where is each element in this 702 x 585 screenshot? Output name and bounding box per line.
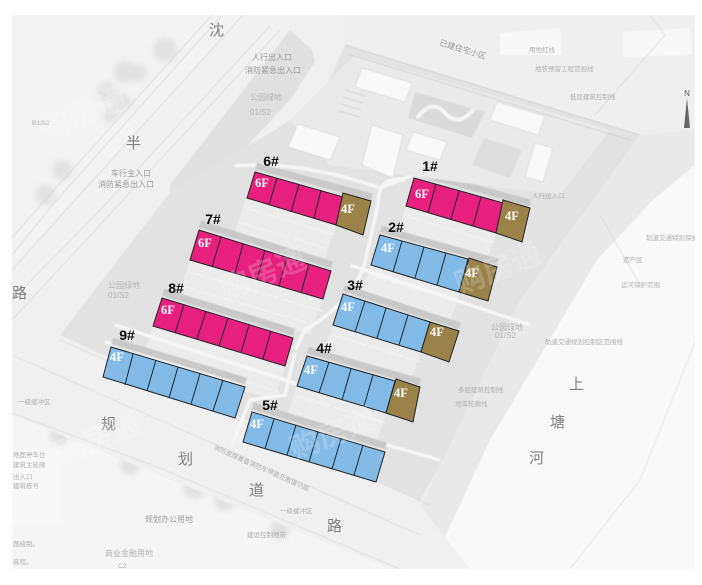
map labels: 01/S2	[495, 331, 516, 340]
map labels: B1/B2	[32, 120, 50, 127]
site ground	[60, 45, 640, 500]
building 1#: 4F	[505, 209, 519, 223]
compass north arrow	[684, 89, 690, 128]
building 6#: 6F	[255, 176, 269, 190]
map labels: 一级缓冲区	[18, 397, 51, 406]
building 9#	[103, 327, 245, 418]
map labels: 01/S2	[108, 291, 129, 300]
watermarks: 购房通	[215, 242, 311, 306]
river area	[430, 165, 695, 569]
building 7#: 7#	[205, 211, 221, 227]
map labels: 公园绿地	[108, 280, 140, 290]
map labels: 消防紧急出入口	[98, 179, 154, 189]
building 3#: 4F	[341, 300, 355, 314]
building 3#: 4F	[430, 325, 444, 339]
watermarks	[40, 120, 498, 460]
building 8#	[153, 280, 293, 366]
map labels: 轨道交通规划控制区范围线	[545, 337, 624, 346]
map labels: 路	[12, 285, 27, 302]
building 2#: 2#	[388, 219, 404, 235]
map labels: 人行出入口	[252, 52, 292, 62]
map labels: 消防紧急出入口	[245, 65, 301, 75]
map labels: 建筑主轮廓	[13, 460, 46, 469]
building 5#	[243, 397, 385, 482]
map labels: 公园绿地	[491, 322, 523, 332]
building 1#: 6F	[415, 187, 429, 201]
building 6#	[247, 153, 371, 235]
map labels: 多层建筑控制线	[458, 385, 504, 394]
map labels: 建筑栋号	[13, 481, 40, 490]
community facilities area	[288, 45, 640, 195]
map labels: 规	[101, 416, 116, 433]
building 9#: 9#	[119, 327, 135, 343]
compass north arrow: N	[684, 89, 690, 98]
map labels: 消防道路兼备消防车停靠及救援功能	[212, 443, 311, 493]
map labels: 路	[327, 518, 342, 535]
building 1#: 1#	[422, 158, 438, 174]
building 4#: 4F	[304, 363, 318, 377]
watermarks: 购房通	[450, 237, 546, 301]
building 2#	[371, 219, 497, 301]
map labels: 建设控制地带	[247, 530, 286, 539]
map labels: 遗产区	[623, 255, 643, 264]
building 8#: 6F	[161, 303, 175, 317]
south road	[53, 426, 468, 568]
building 1#	[406, 158, 530, 242]
map labels: 用地红线	[529, 45, 556, 54]
map labels: 公园绿地	[250, 92, 282, 102]
map labels: 01/S2	[250, 108, 271, 117]
map labels: 商业金融用地	[105, 548, 153, 558]
map labels: 沈	[209, 22, 224, 39]
building 2#: 4F	[465, 266, 479, 280]
building 4#	[297, 340, 420, 422]
north neighbourhood	[340, 15, 695, 165]
watermarks: 购房通	[285, 402, 381, 466]
building 9#: 4F	[110, 350, 124, 364]
building 4#: 4F	[394, 386, 408, 400]
map labels: 塘	[550, 414, 565, 431]
map labels: 图绘制。	[13, 539, 39, 548]
map labels: C2	[118, 563, 127, 570]
building 6#: 4F	[341, 202, 355, 216]
map labels: 规划办公用地	[145, 514, 193, 524]
watermarks: 购房通	[35, 82, 131, 146]
building shadows	[112, 166, 530, 446]
map labels: 道	[249, 482, 264, 499]
building 4#: 4#	[316, 340, 332, 356]
gardens and lanes	[142, 198, 496, 445]
map labels: 上	[569, 376, 584, 393]
building 2#: 4F	[381, 241, 395, 255]
map labels: 已建住宅小区	[438, 37, 487, 61]
building 7#: 6F	[198, 236, 212, 250]
map labels: 人行出入口	[532, 191, 564, 200]
map labels: 地库轮廓线	[455, 399, 488, 408]
watermarks: 购房通	[50, 407, 146, 471]
building 5#: 4F	[250, 417, 264, 431]
map labels: 地面停车位	[13, 450, 46, 459]
map labels: 出入口	[13, 472, 32, 481]
map labels: 车行主入口	[111, 168, 151, 178]
map labels: 地铁预留工程范围线	[535, 64, 594, 73]
map labels: 高程。	[13, 557, 32, 566]
map labels: 低层建筑控制线	[570, 92, 616, 101]
tree belts	[35, 38, 290, 540]
map labels: 划	[178, 451, 193, 468]
building 6#: 6#	[263, 153, 279, 169]
road: Shenban Road	[12, 15, 285, 300]
map labels: 一级缓冲区	[280, 506, 313, 515]
building 3#	[333, 277, 459, 362]
building 5#: 5#	[262, 397, 278, 413]
map labels: 半	[126, 135, 141, 152]
map labels: 河	[529, 450, 544, 467]
building 8#: 8#	[168, 280, 184, 296]
green strip along road	[170, 30, 315, 195]
building 3#: 3#	[347, 277, 363, 293]
building 7#	[190, 211, 331, 299]
map labels: 运河保护范围	[621, 280, 660, 289]
